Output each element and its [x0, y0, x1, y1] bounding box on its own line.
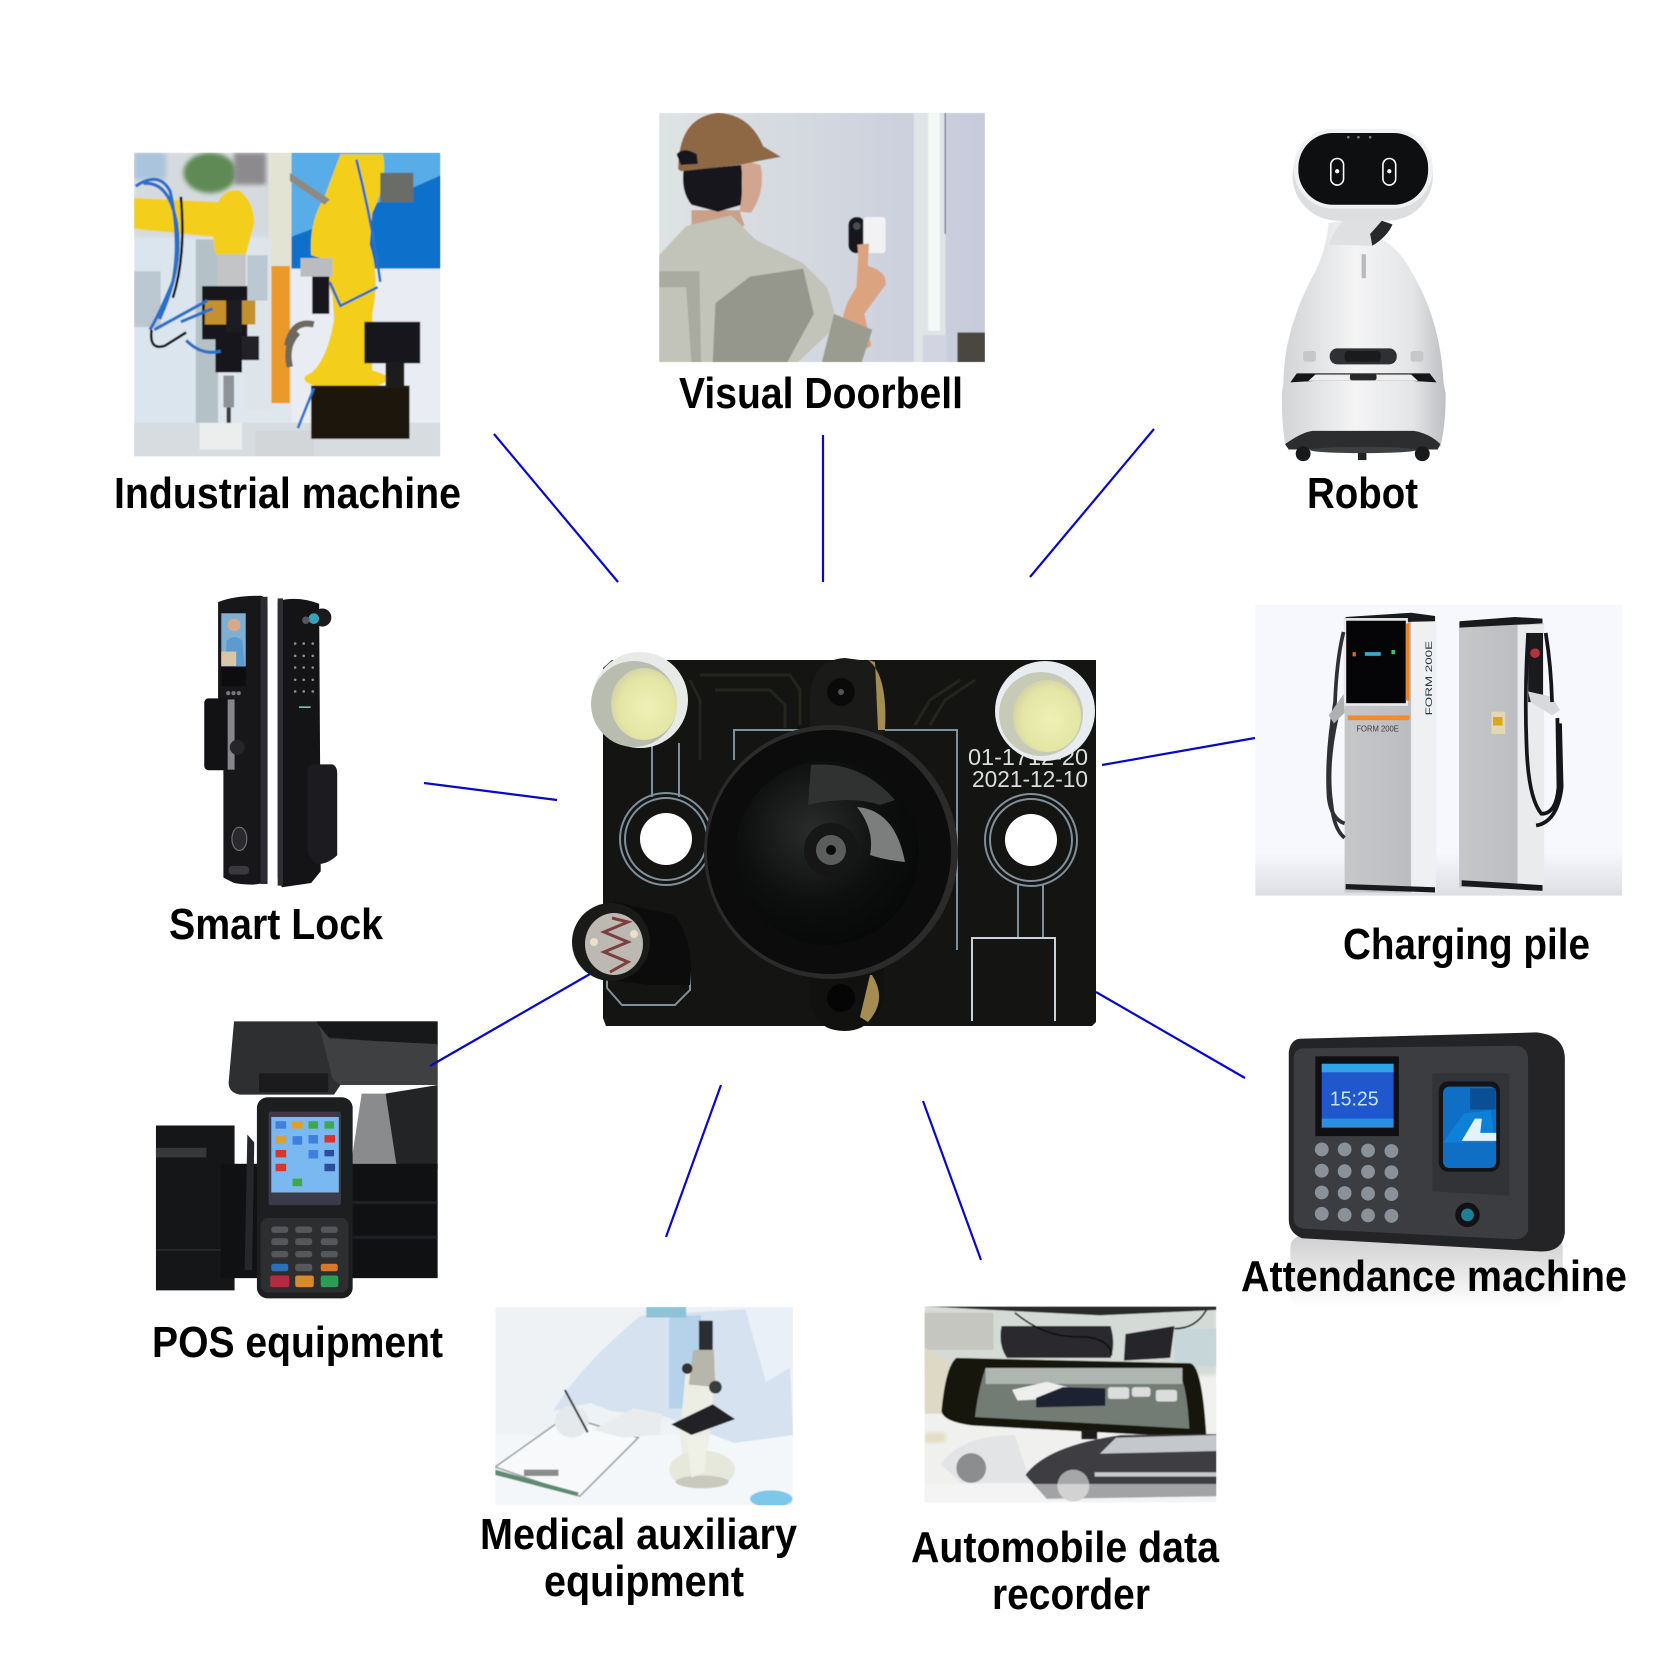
panel: automobile data recorder [911, 1306, 1219, 1619]
panel: industrial machine [114, 153, 461, 518]
panel: smart lock [169, 596, 383, 949]
photo: man pressing doorbell [659, 113, 985, 362]
label: Medical auxiliary equipment: Medical auxiliary [480, 1510, 797, 1559]
photo: rear-view mirror dash recorder [924, 1306, 1216, 1503]
silk traces [607, 730, 1077, 1021]
PCB date text: 2021-12-10 [972, 766, 1088, 792]
left LED [591, 652, 688, 748]
PCB date text: 01-1712-20 [968, 744, 1088, 770]
connector lines [424, 429, 1255, 1260]
photo: robot arms [134, 153, 440, 457]
illustration: smart door lock [204, 596, 337, 887]
photo: EV chargers: FORM 200E [1356, 724, 1399, 733]
center: camera module board [572, 652, 1096, 1031]
label: Charging pile: Charging pile [1343, 920, 1590, 969]
photoresistor [572, 902, 691, 985]
line: visual doorbell [822, 435, 824, 582]
label: Medical auxiliary equipment: equipment [544, 1557, 744, 1606]
label: POS equipment: POS equipment [152, 1318, 443, 1367]
lens assembly [704, 725, 958, 979]
photo: EV chargers: FORM 200E [1424, 641, 1434, 715]
label: Industrial machine: Industrial machine [114, 469, 461, 518]
panel: attendance machine [1241, 1032, 1627, 1307]
panel: medical auxiliary equipment [480, 1307, 797, 1606]
panel: charging pile [1255, 605, 1622, 969]
label: Automobile data recorder: recorder [992, 1570, 1150, 1619]
line: smart lock [424, 783, 557, 800]
right LED [995, 661, 1095, 761]
label: Visual Doorbell: Visual Doorbell [679, 369, 963, 418]
mounting lobes [810, 658, 885, 1031]
photo: EV chargers [1255, 605, 1622, 896]
line: charging pile [1102, 738, 1255, 765]
panel: visual doorbell [659, 113, 985, 418]
mounting holes [640, 813, 1057, 866]
PCB date text [968, 744, 1088, 792]
label: Smart Lock: Smart Lock [169, 900, 383, 949]
label: Automobile data recorder: Automobile data [911, 1523, 1219, 1572]
panel: POS equipment [152, 1021, 443, 1367]
line: industrial machine [494, 434, 618, 582]
photo: POS terminal with printer [156, 1021, 438, 1298]
label: Robot: Robot [1307, 469, 1418, 518]
line: medical [666, 1085, 721, 1237]
label: Automobile data recorder [911, 1523, 1219, 1619]
line: attendance [1096, 992, 1245, 1078]
board [603, 660, 1096, 1026]
label: Medical auxiliary equipment [480, 1510, 797, 1606]
line: robot [1030, 429, 1154, 577]
line: POS equipment [430, 974, 590, 1066]
photo: lab worker with microscope [495, 1307, 793, 1507]
label: Attendance machine: Attendance machine [1241, 1252, 1627, 1301]
panel: robot [1282, 129, 1446, 518]
illustration: fingerprint attendance terminal [1289, 1032, 1565, 1307]
illustration: fingerprint attendance terminal: 15:25 [1330, 1088, 1379, 1110]
line: automobile [923, 1101, 981, 1260]
illustration: white robot [1282, 129, 1446, 461]
